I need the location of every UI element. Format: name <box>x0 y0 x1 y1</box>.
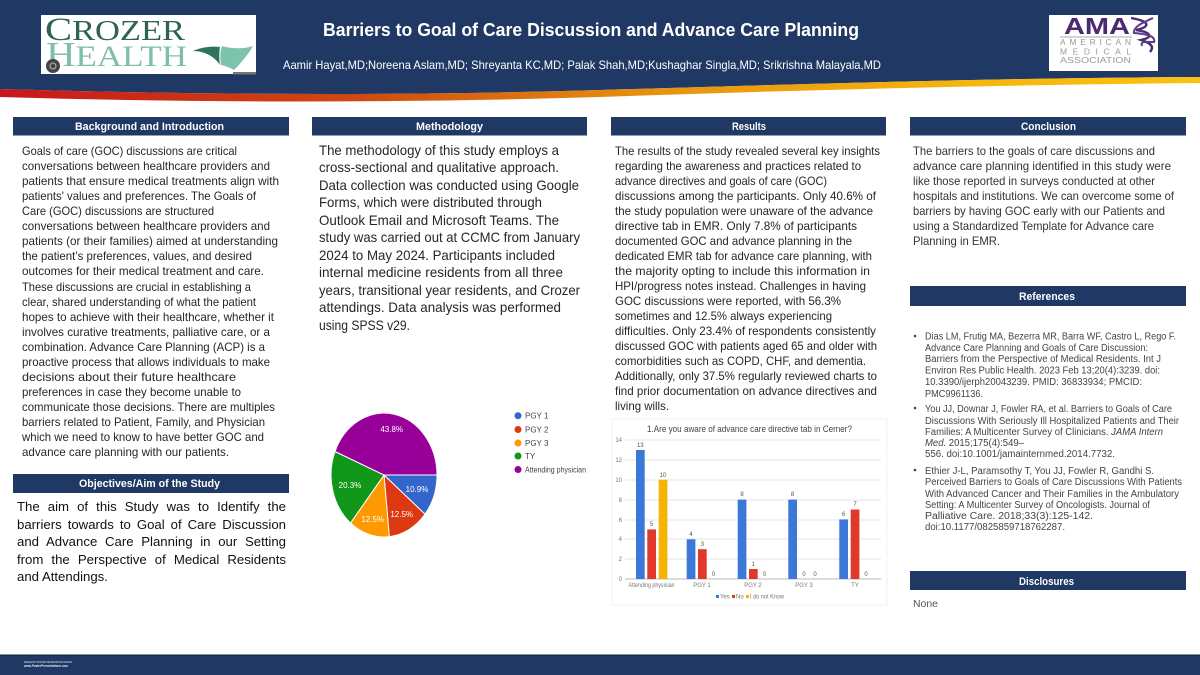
bar chart: awareness of advance care directive tab <box>612 419 887 605</box>
bar chart: awareness of advance care directive tab: PGY 2 <box>744 583 762 589</box>
text: methodology body: using SPSS v29. <box>319 317 410 333</box>
heading: results <box>611 117 886 136</box>
text: background body: involves curative treatments, palliative care, or a <box>22 325 270 339</box>
text: objectives body: from the Perspective of Medical Residents <box>17 552 286 567</box>
reference: Dias et al: PMC9961136. <box>925 389 983 400</box>
text: conclusion body: like those reported in surveys conducted at other <box>913 174 1155 188</box>
text: methodology body: Forms, which were distributed through <box>319 194 542 210</box>
reference: You et al <box>914 404 1180 460</box>
bar chart: awareness of advance care directive tab: 4 <box>619 537 623 543</box>
text: results body: advance directives and goals of care (GOC) <box>615 174 827 188</box>
text: methodology body: Data collection was conducted using Google <box>319 177 579 193</box>
text: conclusion body <box>913 144 1175 248</box>
bar chart: awareness of advance care directive tab: 5 <box>650 522 654 528</box>
text: background body: barriers related to Patient, Family, and Physician <box>22 415 265 429</box>
bar chart: awareness of advance care directive tab: 1 <box>752 562 756 568</box>
text: objectives body: The aim of this Study was to Identify the <box>17 499 286 514</box>
text: results body: HPI/progress notes instead. Challenges in having <box>615 279 866 293</box>
text: background body: combination. Advance Care Planning (ACP) is a <box>22 340 265 354</box>
text: objectives body: barriers towards to Goal of Care Discussion <box>17 517 286 532</box>
text: methodology body: Outlook Email and Microsoft Teams. The <box>319 212 559 228</box>
bar chart: awareness of advance care directive tab: PGY 1 <box>693 583 711 589</box>
heading: objectives <box>13 474 289 493</box>
text: background body: which we need to know to have better GOC and <box>21 430 264 444</box>
text: results body: find prior documentation on advance directives and <box>615 384 877 398</box>
reference: Ethier et al: Ethier J-L, Paramsothy T, You JJ, Fowler R, Gandhi S. <box>925 466 1154 477</box>
bar chart: awareness of advance care directive tab: 1.Are you aware of advance care directive tab in Cerner? <box>647 424 852 434</box>
text: background body: the patient’s preferences, values, and desired <box>22 249 252 263</box>
panel: conclusion <box>910 117 1186 248</box>
bar chart: awareness of advance care directive tab: 0 <box>802 572 806 578</box>
text: background body: proactive process that allows individuals to make <box>22 355 270 369</box>
bar chart: awareness of advance care directive tab: 10 <box>615 478 623 484</box>
text: background body <box>21 144 279 459</box>
text: objectives body: and Advance Care Planning in our Setting <box>17 534 286 549</box>
bar chart: awareness of advance care directive tab: 0 <box>712 572 716 578</box>
bar chart: awareness of advance care directive tab: 8 <box>619 498 623 504</box>
bar chart legend: No <box>736 594 744 600</box>
text: background body: outcomes for their medical treatment and care. <box>22 264 264 278</box>
logo: Crozer Health: HEALTH <box>46 35 187 74</box>
reference: Ethier et al: Perceived Barriers to Goals of Care Discussions With Patients <box>925 477 1182 488</box>
bar chart legend: I do not Know <box>750 594 785 600</box>
reference: You et al: Discussions With Seriously Ill Hospitalized Patients and Their <box>925 416 1180 427</box>
bar chart: awareness of advance care directive tab: 7 <box>853 502 857 508</box>
pie chart: respondents by role: 20.3% <box>339 481 361 490</box>
text: results body: discussed GOC with patients aged 65 and older with <box>615 339 877 353</box>
pie legend <box>514 412 586 474</box>
heading: methodology: Methodology <box>416 121 484 133</box>
heading: methodology <box>312 117 587 136</box>
heading: references: References <box>1019 291 1075 303</box>
bar chart: awareness of advance care directive tab: 12 <box>615 458 623 464</box>
text: background body: patients (or their families) aimed at understanding <box>22 234 278 248</box>
footer text <box>23 661 72 668</box>
text: conclusion body: hospitals and institutions. We can overcome some of <box>913 189 1175 203</box>
pie chart: respondents by role <box>331 413 437 537</box>
text: background body: preferences in case they become unable to <box>22 385 241 399</box>
logo: AMA: ASSOCIATION <box>1060 56 1131 65</box>
heading: conclusion: Conclusion <box>1021 121 1076 133</box>
bar chart: awareness of advance care directive tab: PGY 3 <box>795 583 813 589</box>
text: results body: sometimes and 12.5% always experiencing <box>615 309 832 323</box>
bar chart: awareness of advance care directive tab: 8 <box>791 492 795 498</box>
text: disclosures body: None <box>913 598 938 610</box>
text: conclusion body: Planning in EMR. <box>913 234 1000 248</box>
text: methodology body: attendings. Data analysis was performed <box>319 299 561 315</box>
reference: You et al: You JJ, Downar J, Fowler RA, et al. Barriers to Goals of Care <box>925 404 1172 415</box>
text: background body: advance care planning with our patients. <box>22 445 229 459</box>
reference: Dias et al: Barriers from the Perspective of Medical Residents. Int J <box>925 354 1161 365</box>
pie legend: TY <box>525 452 536 461</box>
text: results body: regarding the awareness and practices related to <box>615 159 861 173</box>
panel: references <box>910 286 1186 533</box>
text: results body: Additionally, only 37.5% regularly reviewed charts to <box>615 369 877 383</box>
text: background body: conversations between healthcare providers and <box>22 219 270 233</box>
text: results body <box>615 144 880 413</box>
heading: objectives: Objectives/Aim of the Study <box>79 478 221 490</box>
pie legend: PGY 2 <box>525 426 549 434</box>
heading: references <box>910 286 1186 306</box>
text: results body: comorbidities such as COPD, CHF, and dementia. <box>615 354 866 368</box>
text: background body: hopes to achieve with their healthcare, whether it <box>22 310 275 324</box>
logo: Crozer Health: CROZER <box>45 12 185 48</box>
text: conclusion body: using a Standardized Template for Advance care <box>913 219 1154 233</box>
text: background body: decisions about their future healthcare <box>22 370 236 384</box>
panel: background and introduction <box>13 117 289 459</box>
footer band <box>0 654 1200 675</box>
authors: Aamir Hayat,MD;Noreena Aslam,MD; Shreyanta KC,MD; Palak Shah,MD;Kushaghar Singla,MD; Srikrishna Malayala,MD <box>283 58 881 72</box>
text: background body: clear, shared understanding of what the patient <box>22 295 257 309</box>
panel: objectives <box>13 474 289 590</box>
logo: AMA: AMA <box>1064 13 1130 39</box>
logo: AMA: MEDICAL <box>1060 46 1131 56</box>
reference: You et al: Med. 2015;175(4):549– <box>925 438 1024 449</box>
reference: You et al: 556. doi:10.1001/jamainternmed.2014.7732. <box>925 449 1115 460</box>
text: results body: living wills. <box>615 399 669 413</box>
bar chart: awareness of advance care directive tab: 6 <box>842 512 846 518</box>
reference: Ethier et al: Palliative Care. 2018;33(3):125-142. <box>925 511 1093 522</box>
reference: Ethier et al <box>914 466 1182 533</box>
bar chart: awareness of advance care directive tab: 14 <box>615 438 623 444</box>
reference: Dias et al: 10.3390/ijerph20043239. PMID: 36833934; PMCID: <box>925 377 1142 388</box>
reference: Ethier et al: doi:10.1177/0825859718762287. <box>925 522 1065 533</box>
text: results body: directive tab in EMR. Only 7.8% of participants <box>615 219 857 233</box>
panel: methodology <box>312 117 587 537</box>
bar chart: awareness of advance care directive tab: 6 <box>619 518 623 524</box>
logo: AMA <box>1049 13 1158 71</box>
logo: AMA: AMERICAN <box>1060 37 1131 47</box>
footer text: www.PosterPresentations.com <box>23 664 68 668</box>
bar chart: awareness of advance care directive tab: 0 <box>864 572 868 578</box>
bar chart legend: Yes <box>720 594 730 600</box>
heading: conclusion <box>910 117 1186 136</box>
reference: Dias et al: Advance Care Planning and Goals of Care Discussion: <box>925 343 1148 354</box>
title: Barriers to Goal of Care Discussion and Advance Care Planning <box>323 19 859 40</box>
panel: disclosures <box>910 571 1186 610</box>
bar chart: awareness of advance care directive tab: 2 <box>619 557 623 563</box>
text: methodology body: internal medicine residents from all three <box>319 264 563 280</box>
text: methodology body: The methodology of this study employs a <box>319 142 559 158</box>
pie chart: respondents by role: 12.5% <box>361 515 384 524</box>
text: conclusion body: advance care planning identified in this study were <box>913 159 1171 173</box>
text: background body: patients' values and preferences. The Goals of <box>22 189 257 203</box>
pie legend: PGY 3 <box>525 439 549 448</box>
text: results body: GOC discussions were reported, with 56.3% <box>615 294 841 308</box>
text: results body: The results of the study revealed several key insights <box>615 144 880 158</box>
reference: Ethier et al: With Advanced Cancer and Their Families in the Ambulatory <box>925 489 1179 500</box>
text: conclusion body: barriers by having GOC early with our Patients and <box>913 204 1165 218</box>
pie chart: respondents by role: 10.9% <box>406 485 428 494</box>
bar chart: awareness of advance care directive tab: Attending physician <box>628 583 674 589</box>
text: results body: the study population were unaware of the advance <box>615 204 873 218</box>
bar chart: awareness of advance care directive tab: 0 <box>763 572 767 578</box>
pie legend: PGY 1 <box>525 412 549 420</box>
text: methodology body: cross-sectional and qualitative approach. <box>319 159 559 175</box>
pie chart: respondents by role: 43.8% <box>380 425 403 434</box>
reference: Dias et al <box>914 332 1176 400</box>
text: results body: documented GOC and advance planning in the <box>615 234 852 248</box>
text: background body: conversations between healthcare providers and <box>22 159 270 173</box>
text: background body: patients that ensure medical treatments align with <box>22 174 279 188</box>
heading: background <box>13 117 289 136</box>
text: background body: communicate those decisions. There are multiples <box>22 400 275 414</box>
reference: You et al: Families: A Multicenter Survey of Clinicians. JAMA Intern <box>925 427 1163 438</box>
text: background body: Care (GOC) discussions are structured <box>22 204 214 218</box>
text: results body: difficulties. Only 23.4% of respondents consistently <box>615 324 876 338</box>
text: objectives body: and Attendings. <box>17 569 108 584</box>
bar chart: awareness of advance care directive tab: 3 <box>701 542 705 548</box>
heading: disclosures <box>910 571 1186 590</box>
text: methodology body: 2024 to May 2024. Participants included <box>319 247 555 263</box>
text: conclusion body: The barriers to the goals of care discussions and <box>913 144 1155 158</box>
text: methodology body: study was carried out at CCMC from January <box>319 229 580 245</box>
bar chart: awareness of advance care directive tab: 10 <box>660 473 667 479</box>
text: methodology body: years, transitional year residents, and Crozer <box>319 282 580 298</box>
text: results body: dedicated EMR tab for advance care planning, with <box>615 249 872 263</box>
text: background body: Goals of care (GOC) discussions are critical <box>22 144 237 158</box>
bar chart legend <box>716 594 785 600</box>
pie legend: Attending physician <box>525 466 586 474</box>
header band <box>0 0 1200 102</box>
bar chart: awareness of advance care directive tab: TY <box>851 583 859 589</box>
reference: Dias et al: Environ Res Public Health. 2023 Feb 13;20(4):3239. doi: <box>925 366 1160 376</box>
text: background body: These discussions are crucial in establishing a <box>22 280 251 294</box>
panel: results <box>611 117 887 605</box>
logo: Crozer Health <box>41 12 256 74</box>
text: methodology body <box>319 142 580 333</box>
bar chart: awareness of advance care directive tab: 13 <box>637 443 644 449</box>
bar chart: awareness of advance care directive tab: 0 <box>813 572 817 578</box>
bar chart: awareness of advance care directive tab: 0 <box>619 577 623 583</box>
heading: disclosures: Disclosures <box>1019 576 1074 588</box>
reference: Dias et al: Dias LM, Frutig MA, Bezerra MR, Barra WF, Castro L, Rego F. <box>925 332 1176 342</box>
footer text: RESEARCH POSTER PRESENTATION DESIGN <box>24 661 72 664</box>
swoosh <box>0 77 1200 102</box>
reference: Ethier et al: Setting: A Multicenter Survey of Oncologists. Journal of <box>925 500 1150 511</box>
text: objectives body <box>17 498 286 590</box>
heading: results: Results <box>732 121 766 133</box>
text: results body: discussions among the participants. Only 40.6% of <box>615 189 877 203</box>
bar chart: awareness of advance care directive tab: 4 <box>689 532 693 538</box>
heading: background: Background and Introduction <box>75 121 224 133</box>
pie chart: respondents by role: 12.5% <box>390 510 413 519</box>
text: results body: the majority opting to include this information in <box>615 264 870 278</box>
bar chart: awareness of advance care directive tab: 8 <box>740 492 744 498</box>
